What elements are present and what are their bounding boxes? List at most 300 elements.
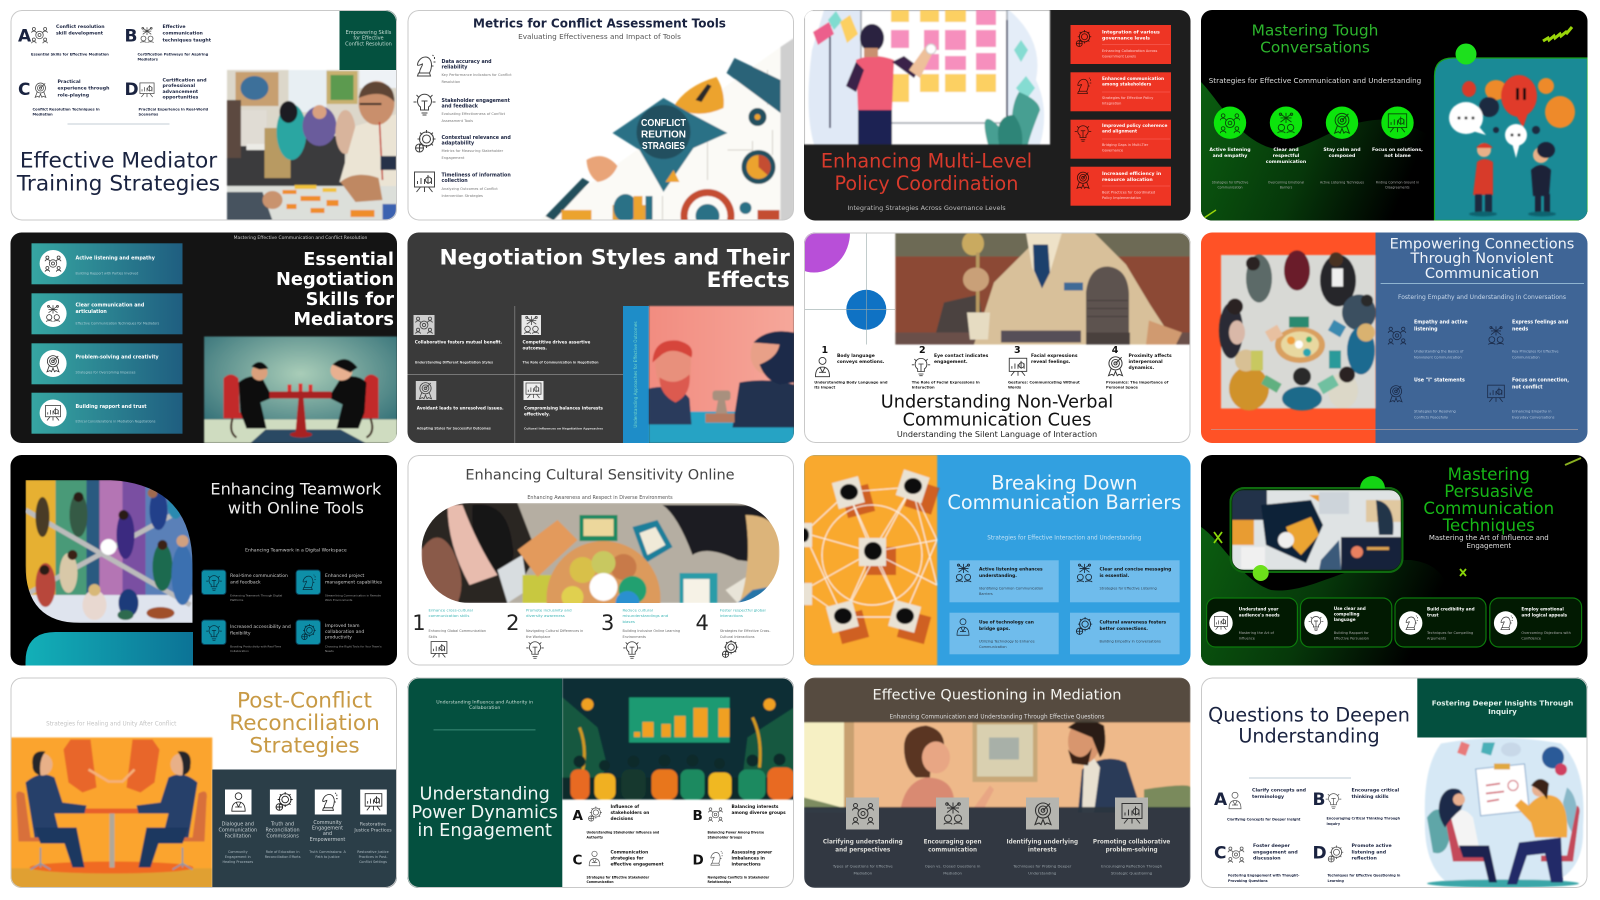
cue 1: conveys emotions. [837, 359, 885, 365]
title: Empowering Connections [1390, 236, 1574, 252]
cue 3: Facial expressions [1031, 353, 1078, 359]
item C: Mediation [32, 112, 53, 116]
header box [340, 10, 397, 70]
benefit 1: and feedback [230, 580, 261, 586]
style 3 [416, 381, 504, 430]
item A: decisions [610, 816, 634, 822]
header box: Conflict Resolution [345, 41, 392, 47]
practice 2: Communication [1512, 356, 1540, 360]
card 3: Communication [979, 645, 1007, 649]
item C: Fostering Engagement with Thought- [1228, 874, 1300, 878]
benefit 2 [296, 570, 383, 602]
question type 1: Types of Questions for Effective [832, 864, 893, 868]
goal 2: 2 [506, 611, 519, 635]
title: Skills for [306, 289, 394, 310]
question type 3 [1007, 798, 1078, 876]
title: Breaking Down [991, 471, 1137, 494]
card 3: Improved policy coherence [1102, 123, 1167, 129]
item C: Practical [58, 79, 81, 85]
step 4: Disagreements [1385, 186, 1410, 190]
item C: Conflict Resolution Techniques in [32, 108, 100, 112]
card 4: Building Empathy in Conversations [1100, 640, 1161, 644]
title: Questions to Deepen [1208, 704, 1410, 726]
title: Enhancing Teamwork [210, 479, 382, 498]
technique 1 [1207, 598, 1297, 647]
practice 2: Reconciliation Efforts [265, 855, 301, 859]
subtitle: Strategies for Effective Interaction and Understanding [987, 535, 1142, 541]
practice 4: Practices in Post- [359, 855, 388, 859]
title: Enhancing Multi-Level [821, 150, 1032, 173]
item D: Assessing power [732, 850, 773, 856]
goal 2: diversity awareness [526, 613, 565, 618]
cue 3 [1008, 345, 1080, 390]
practice 1: Healing Processes [222, 860, 253, 864]
goal 4: Foster respectful global [720, 608, 766, 612]
cue 4: interpersonal [1128, 359, 1163, 365]
step 1: Strategies for Effective [1212, 180, 1248, 184]
header box: Empowering Skills [346, 30, 392, 36]
item B: Inquiry [1326, 822, 1341, 826]
decorative circle: purple [778, 192, 850, 272]
title: Understanding [1238, 724, 1380, 748]
item D: Certification and [162, 78, 207, 84]
practice 2 [265, 790, 301, 859]
benefit 2: Streamlining Communication in Remote [325, 594, 381, 598]
illustration label: REUTION [641, 128, 686, 140]
item B: Effective [162, 24, 186, 30]
item C: engagement and [1253, 849, 1298, 855]
style 2: outcomes. [522, 346, 547, 350]
benefit 3: Increased accessibility and [230, 624, 291, 630]
card 2: Strategies for Effective Listening [1100, 586, 1157, 590]
skill 2 [32, 293, 182, 334]
technique 3: Arguments [1427, 636, 1446, 640]
left panel: Understanding [420, 784, 550, 804]
technique 2 [1300, 598, 1392, 647]
slide 1: Effective Mediator Training Strategies [10, 10, 398, 220]
item A: Influence of [610, 804, 639, 810]
title: Training Strategies [16, 172, 220, 197]
item A: Conflict resolution [56, 24, 105, 30]
photo: overhead view of discussion table [422, 503, 780, 655]
practice 4: Justice Practices [353, 828, 392, 834]
item C: C [572, 852, 582, 868]
item C: Foster deeper [1253, 843, 1291, 849]
metric 2: and feedback [442, 104, 479, 110]
title: Communication Barriers [947, 491, 1181, 514]
title: Communication [1423, 499, 1554, 518]
background blob [1201, 527, 1454, 666]
item D: professional [162, 83, 196, 89]
goal 1: Enhance cross-cultural [428, 608, 473, 612]
card 2 [1070, 560, 1180, 602]
benefit 4: collaboration and [325, 629, 364, 635]
title: Mediators [293, 309, 394, 330]
dark panel [212, 770, 397, 888]
card 4: better connections. [1100, 626, 1148, 632]
metric 3: adaptability [442, 141, 475, 147]
card 4 [1070, 167, 1171, 206]
green half dot [1360, 476, 1385, 488]
subtitle: Understanding the Silent Language of Interaction [897, 429, 1097, 439]
cue 2: engagement. [934, 359, 968, 365]
metric 1: Resolution [442, 80, 460, 84]
benefit 2: Enhanced project [325, 573, 365, 579]
benefit 3 [202, 620, 291, 653]
skill 2: Clear communication and [76, 302, 145, 308]
goal 2: Promote inclusivity and [526, 608, 572, 612]
slide 4: Mastering Tough Conversations [1201, 10, 1588, 220]
skill 4 [32, 393, 182, 434]
practice 4: Focus on connection, [1512, 378, 1569, 384]
background blob [1201, 82, 1435, 220]
step 1: and empathy [1213, 153, 1247, 159]
slide 10: Enhancing Cultural Sensitivity Online [408, 455, 794, 666]
skill 2: Effective Communication Techniques for Mediators [76, 321, 159, 325]
item D: Relationships [708, 880, 731, 884]
question type 2: Mediation [943, 870, 963, 876]
practice 3: and [323, 831, 332, 837]
item A: Clarify concepts and [1252, 788, 1306, 794]
slide 7: Understanding Non-Verbal Communication Cues [778, 192, 1190, 443]
question type 2: communication [928, 848, 977, 854]
technique 4 [1490, 598, 1582, 647]
card 3: Bridging Gaps in Multi-Tier [1102, 143, 1149, 147]
item D: imbalances in [732, 856, 765, 862]
card 4: Best Practices for Coordinated [1102, 190, 1155, 194]
step 2 [1266, 106, 1306, 190]
practice 1: Engagement in [225, 855, 251, 859]
illustration: person arranging sticky notes [804, 10, 1050, 144]
metric 3: Engagement [442, 156, 465, 160]
metric 4: collection [442, 178, 468, 184]
practice 4 [353, 790, 392, 864]
question type 1 [823, 798, 903, 876]
item C: role-playing [58, 92, 89, 98]
card 4: resource allocation [1102, 177, 1153, 183]
subtitle: Integrating Strategies Across Governance Levels [847, 204, 1006, 212]
cue 2: 2 [919, 345, 926, 356]
slide 8: Empowering Connections Through Nonviolent Communication [1201, 232, 1588, 443]
practice 3: Strategies for Resolving [1414, 410, 1456, 414]
left panel: Understanding Influence and Authority in [436, 700, 533, 706]
item B: techniques taught [162, 37, 212, 43]
decorative circle: blue [846, 290, 886, 330]
item B [692, 804, 786, 840]
slide 12: Mastering Persuasive Communication Techniques [1201, 455, 1588, 666]
subtitle: Evaluating Effectiveness and Impact of Tools [518, 32, 681, 41]
item B: B [1312, 790, 1325, 810]
step 1 [1209, 106, 1251, 190]
benefit 1: Real-time communication [230, 573, 288, 579]
item C [18, 79, 109, 116]
illustration: team on striped background [26, 480, 194, 623]
benefit 2: Work Environments [325, 598, 353, 602]
style 2 [522, 315, 599, 364]
style 3: Avoidant leads to unresolved issues. [417, 406, 504, 410]
practice 2: Key Principles for Effective [1512, 350, 1559, 354]
step 2: Barriers [1280, 186, 1293, 190]
question type 1: and perspectives [835, 848, 891, 854]
metric 2: Stakeholder engagement [442, 98, 511, 104]
illustration label: STRAGIES [642, 140, 685, 152]
item D: opportunities [162, 95, 199, 101]
card 4 [1070, 613, 1180, 654]
item B: B [692, 808, 703, 824]
question type 1: Mediation [853, 870, 873, 876]
benefit 1 [202, 570, 288, 602]
card 4: Policy Implementation [1102, 196, 1141, 200]
left panel: Collaboration [469, 705, 500, 711]
slide 16: Questions to Deepen Understanding [1201, 678, 1588, 888]
green marker dot [1456, 44, 1476, 64]
item B: Encouraging Critical Thinking Through [1326, 816, 1401, 820]
practice 3: Path to Justice [315, 855, 340, 859]
card 4: Increased efficiency in [1102, 171, 1161, 177]
technique 1: audience's needs [1239, 612, 1280, 618]
cue 4: Proxemics: The Importance of [1106, 380, 1169, 384]
photo: mediators training around a table [227, 70, 398, 220]
metric 4: Analyzing Outcomes of Conflict [442, 187, 498, 191]
practice 2: needs [1512, 326, 1528, 332]
goal 1 [412, 608, 486, 657]
question type 3: Techniques for Probing Deeper [1012, 864, 1072, 868]
card 1: Integration of various [1102, 30, 1160, 36]
item D: advancement [162, 89, 199, 95]
item D: Techniques for Effective Questioning in [1328, 874, 1401, 878]
style 1: Collaborative fosters mutual benefit. [415, 340, 503, 344]
technique 2: Effective Persuasion [1334, 636, 1369, 640]
practice 4: not conflict [1512, 384, 1543, 390]
style 4 [524, 381, 603, 430]
item C: experience through [58, 86, 109, 92]
practice 1: Nonviolent Communication [1414, 356, 1462, 360]
question type 4: Promoting collaborative [1093, 840, 1170, 846]
practice 3: Conflicts Peacefully [1414, 416, 1448, 420]
item A: A [18, 26, 32, 46]
practice 1: Empathy and active [1414, 320, 1468, 326]
metric 4: Timeliness of information [442, 172, 511, 178]
item A [572, 804, 659, 840]
metric 4: Intervention Strategies [442, 194, 483, 198]
slide 2: Metrics for Conflict Assessment Tools [408, 10, 794, 243]
practice 2: Role of Education in [266, 850, 299, 854]
goal 3 [601, 608, 680, 658]
benefit 4: Needs [325, 649, 334, 653]
cue 3: Gestures: Communicating Without [1008, 380, 1080, 384]
question type 2: Open vs. Closed Questions in [925, 864, 981, 868]
subtitle: Fostering Empathy and Understanding in Conversations [1398, 294, 1566, 301]
practice 3: Use "I" statements [1414, 378, 1465, 384]
item A [1214, 788, 1306, 822]
title: Understanding Non-Verbal [881, 392, 1113, 412]
metric 3: Metrics for Measuring Stakeholder [442, 149, 504, 153]
practice 3: Truth Commissions: A [308, 850, 347, 854]
skill 3: Problem-solving and creativity [76, 354, 160, 360]
card 1: Government Levels [1102, 55, 1136, 59]
title: Conversations [1260, 38, 1370, 56]
style 2: The Role of Communication in Negotiation [522, 360, 599, 364]
cue 2: The Role of Facial Expressions in [912, 380, 980, 384]
title: Effective Questioning in Mediation [873, 687, 1121, 703]
step 1: Active listening [1209, 147, 1251, 153]
step 3: Stay calm and [1323, 147, 1361, 153]
slide 15: Effective Questioning in Mediation [804, 678, 1190, 888]
item D: Practical Experience in Real-World [138, 108, 209, 112]
question type 4: Encouraging Reflection Through [1101, 864, 1163, 868]
benefit 3: Boosting Productivity with Real-Time [230, 644, 281, 648]
metric 2: Evaluating Effectiveness of Conflict [442, 112, 506, 116]
practice 1: Understanding the Basics of [1414, 350, 1464, 354]
technique 4: Employ emotional [1521, 606, 1564, 612]
item B: among diverse groups [732, 810, 786, 816]
subtitle: Enhancing Teamwork in a Digital Workspace [245, 548, 347, 554]
cue 4: 4 [1112, 345, 1119, 356]
practice 1: Dialogue and [222, 822, 254, 828]
card 2: among stakeholders [1102, 82, 1152, 88]
style 4: Cultural Influences on Negotiation Approaches [524, 426, 603, 430]
card 2: Clear and concise messaging [1100, 566, 1171, 572]
item C [1214, 843, 1300, 883]
practice 3 [1390, 378, 1465, 420]
title: Negotiation Styles and Their [439, 246, 790, 270]
title: Techniques [1442, 516, 1535, 535]
header box: Fostering Deeper Insights Through [1432, 698, 1573, 708]
goal 1: Enhancing Global Communication [428, 629, 486, 633]
step 3 [1320, 106, 1364, 184]
goal 4: Cultural Interactions [720, 635, 755, 639]
practice 2: Reconciliation [266, 828, 300, 834]
card 3: Use of technology can [979, 620, 1034, 626]
cue 4: Personal Space [1106, 386, 1138, 390]
technique 4: and logical appeals [1521, 612, 1568, 618]
question type 4: Strategic Questioning [1111, 870, 1153, 876]
step 4: Finding Common Ground in [1376, 180, 1419, 184]
item D: Navigating Conflicts in Stakeholder [708, 876, 770, 880]
item B: Balancing interests [732, 804, 779, 810]
goal 4 [696, 608, 771, 657]
practice 1: Facilitation [225, 834, 251, 840]
goal 2 [506, 608, 583, 658]
illustration: figure with gavel and microphone [895, 232, 1190, 344]
technique 4: Confidence [1521, 636, 1541, 640]
header box [1417, 678, 1588, 738]
subtitle: Strategies for Effective Communication and Understanding [1209, 76, 1421, 85]
subtitle: Enhancing Awareness and Respect in Diverse Environments [527, 495, 673, 501]
question type 1: Clarifying understanding [823, 840, 903, 846]
technique 1: Influence [1239, 636, 1255, 640]
technique 3: Build credibility and [1427, 606, 1475, 612]
skill 3: Strategies for Overcoming Impasses [76, 370, 136, 374]
item D [124, 78, 209, 116]
practice 2 [1488, 320, 1569, 360]
step 1: Communication [1217, 186, 1243, 190]
technique 3: Techniques for Compelling [1426, 631, 1473, 635]
cue 4: dynamics. [1128, 365, 1154, 371]
practice 2: Express feelings and [1512, 320, 1569, 326]
title: Through Nonviolent [1410, 251, 1554, 267]
practice 4: Restorative [360, 822, 386, 828]
skill 2: articulation [76, 309, 107, 315]
item B [124, 24, 212, 62]
item C: Communication [610, 850, 648, 856]
practice 3: Empowerment [310, 837, 345, 843]
goal 2: Navigating Cultural Differences in [526, 629, 583, 633]
cue 2: Eye contact indicates [934, 353, 989, 359]
practice 2: Commissions [266, 834, 299, 840]
step 2: Overcoming Emotional [1268, 180, 1304, 184]
step 2: Clear and [1273, 147, 1299, 153]
skill 4: Ethical Considerations in Mediation Negotiations [76, 420, 156, 424]
card 3: and alignment [1102, 128, 1137, 134]
decorative squiggle [1543, 27, 1572, 41]
item A: Essential Skills for Effective Mediation [31, 52, 109, 56]
goal 4: Strategies for Effective Cross- [720, 629, 771, 633]
question type 4 [1093, 798, 1170, 876]
item C: strategies for [610, 856, 644, 862]
item D [1312, 843, 1401, 883]
practice 4: Everyday Conversations [1512, 416, 1555, 420]
card 2 [1070, 72, 1171, 111]
title: Metrics for Conflict Assessment Tools [473, 16, 726, 30]
cue 2 [912, 345, 989, 390]
item C: Communication [586, 880, 614, 884]
slide 3: Enhancing Multi-Level Policy Coordination [804, 10, 1190, 220]
question type 4: problem-solving [1106, 848, 1158, 854]
header box: Inquiry [1488, 707, 1517, 716]
question type 2 [924, 798, 982, 876]
title: Reconciliation [229, 711, 380, 736]
item D: Learning [1328, 879, 1345, 883]
practice 1: Communication [219, 828, 257, 834]
slide 5: Essential Negotiation Skills for Mediators [10, 232, 397, 443]
slide 11: Breaking Down Communication Barriers [792, 455, 1190, 666]
cue 1 [814, 345, 888, 390]
metric 1: Data accuracy and [442, 59, 492, 65]
cue 1: Its Impact [814, 386, 835, 390]
title: Persuasive [1444, 482, 1533, 501]
item B: Encourage critical [1352, 788, 1400, 794]
title: Communication Cues [903, 410, 1091, 430]
illustration label: CONFLICT [641, 117, 686, 129]
left panel: in Engagement [417, 821, 552, 841]
item D [692, 850, 773, 884]
accent shape [26, 632, 193, 666]
item B: Stakeholder Groups [708, 836, 742, 840]
title: Mastering Tough [1252, 22, 1378, 40]
goal 1: 1 [412, 611, 426, 635]
benefit 4: Improved team [325, 623, 359, 629]
practice 4: Enhancing Empathy in [1512, 410, 1551, 414]
step 4 [1372, 106, 1423, 190]
item A: Authority [586, 836, 603, 840]
item C: C [18, 80, 30, 100]
cue 1: Body language [837, 353, 875, 359]
item D: D [124, 80, 139, 100]
technique 3 [1395, 598, 1486, 647]
lime dot [1253, 565, 1269, 581]
benefit 3: Collaboration [230, 649, 249, 653]
slide 6: Negotiation Styles and Their Effects [408, 232, 794, 443]
item C: Strategies for Effective Stakeholder [586, 876, 650, 880]
skill 4: Building rapport and trust [76, 404, 147, 410]
cue 3: 3 [1014, 345, 1021, 356]
practice 3: Community [313, 820, 342, 826]
illustration: two men with gavel [649, 306, 794, 443]
step 4: Focus on solutions, [1372, 147, 1423, 153]
x marks [1214, 532, 1466, 576]
item D: Promote active [1352, 843, 1392, 849]
